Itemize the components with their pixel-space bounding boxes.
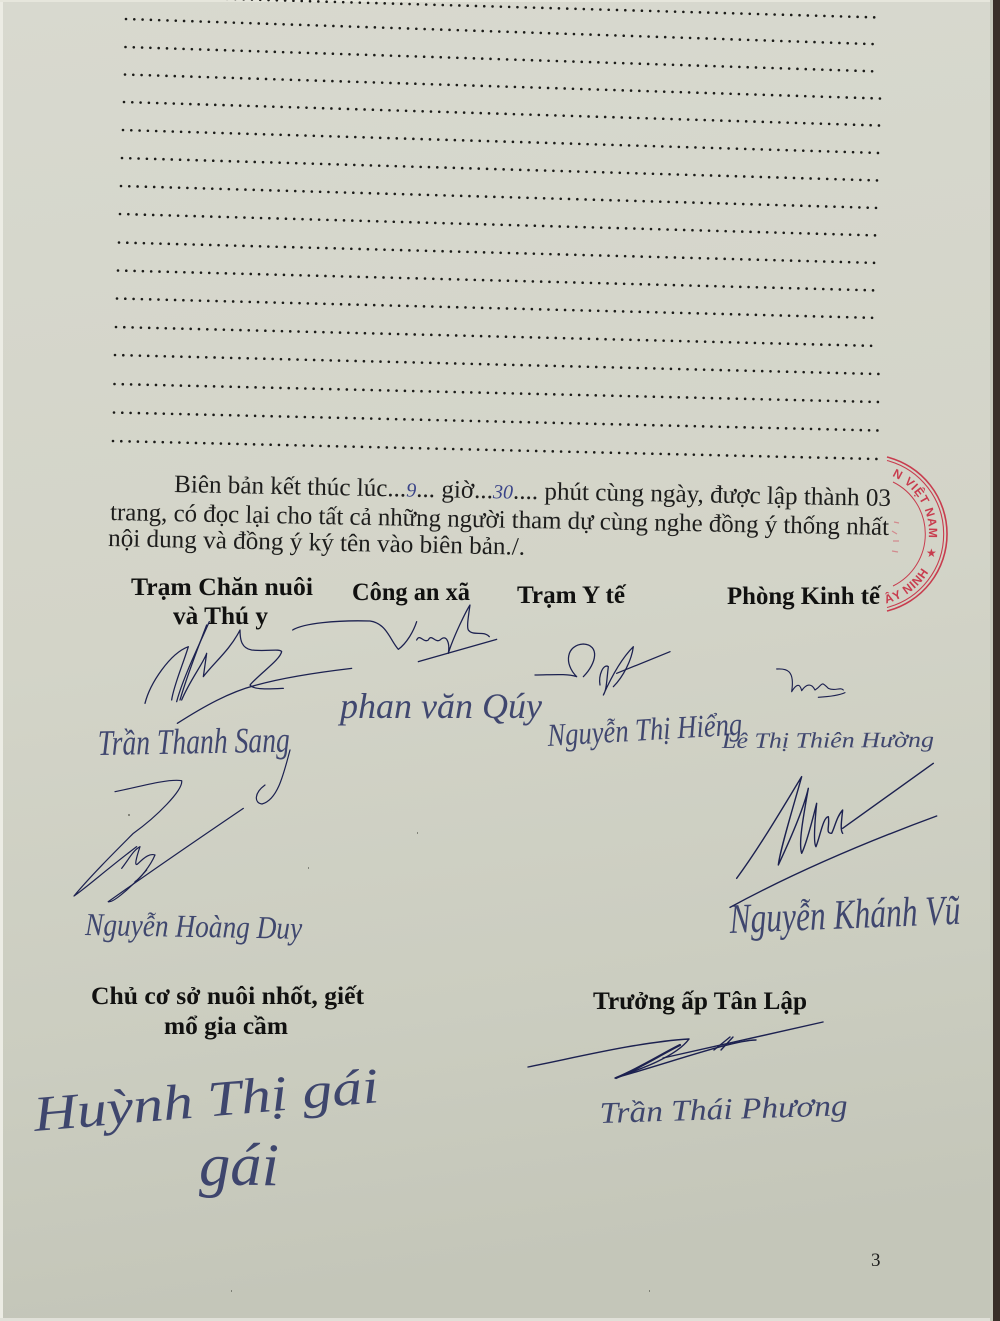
handwritten name: Trần Thanh Sang: [97, 720, 290, 804]
heading: Chủ cơ sở nuôi nhốt, giết mổ gia cầm: Chủ cơ sở nuôi nhốt, giết: [91, 981, 364, 1010]
handwritten name: Lê Thị Thiên Hường: Lê Thị Thiên Hường: [721, 727, 934, 753]
handwritten name: Huỳnh Thị gái: Huỳnh Thị gái: [30, 1057, 381, 1142]
closing paragraph: trang, có đọc lại cho tất cả những người tham dự cùng nghe đồng ý thống nhất: [110, 499, 889, 541]
signature: Công an xã: [293, 605, 497, 662]
dotted blank lines: [113, 0, 880, 459]
handwritten name: Huỳnh Thị gái: gái: [199, 1132, 279, 1198]
heading: Trạm Y tế: Trạm Y tế: [517, 580, 627, 609]
closing paragraph: Biên bản kết thúc lúc...9... giờ...30.... phút cùng ngày, được lập thành 03: [174, 471, 891, 512]
stamp: ★: [926, 546, 937, 560]
heading: Chủ cơ sở nuôi nhốt, giết mổ gia cầm: [91, 981, 364, 1040]
handwritten name: Huỳnh Thị gái: [30, 1057, 381, 1198]
closing paragraph: [108, 471, 891, 561]
signature: Trạm Y tế: [535, 644, 670, 695]
heading: Trưởng ấp Tân Lập: Trưởng ấp Tân Lập: [593, 986, 807, 1015]
stamp: [885, 456, 948, 612]
signature: Trạm Chăn nuôi và Thú y: [145, 622, 352, 723]
handwritten name: Nguyễn Thị Hiểng: Nguyễn Thị Hiểng: [545, 705, 743, 753]
signature: Trưởng ấp Tân Lập: [528, 1022, 823, 1078]
handwritten name: Trần Thái Phương: Trần Thái Phương: [599, 1089, 848, 1130]
signature: Phòng Kinh tế: [777, 669, 845, 697]
stamp: N VIỆT NAM: [892, 468, 938, 538]
heading: Trạm Chăn nuôi và Thú y: và Thú y: [173, 601, 268, 630]
handwritten name: Nguyễn Hoàng Duy: Nguyễn Hoàng Duy: [84, 906, 303, 946]
heading: Phòng Kinh tế: Phòng Kinh tế: [727, 581, 882, 610]
handwritten name: Trần Thanh Sang: Trần Thanh Sang: [97, 720, 290, 763]
page number: 3: [871, 1250, 880, 1271]
heading: Trạm Chăn nuôi và Thú y: Trạm Chăn nuôi: [131, 572, 313, 601]
signature: second signer, right column: [730, 763, 937, 907]
signature: second signer, left column: [74, 780, 243, 902]
stamp: ÂY NINH: [885, 568, 928, 604]
heading: Công an xã: Công an xã: [352, 577, 470, 606]
heading: Trạm Chăn nuôi và Thú y: [131, 572, 313, 630]
handwritten name: Phan Văn Quý: phan văn Qúy: [337, 686, 542, 726]
heading: Chủ cơ sở nuôi nhốt, giết mổ gia cầm: mổ gia cầm: [164, 1011, 288, 1040]
closing paragraph: nội dung và đồng ý ký tên vào biên bản./.: [108, 525, 525, 561]
